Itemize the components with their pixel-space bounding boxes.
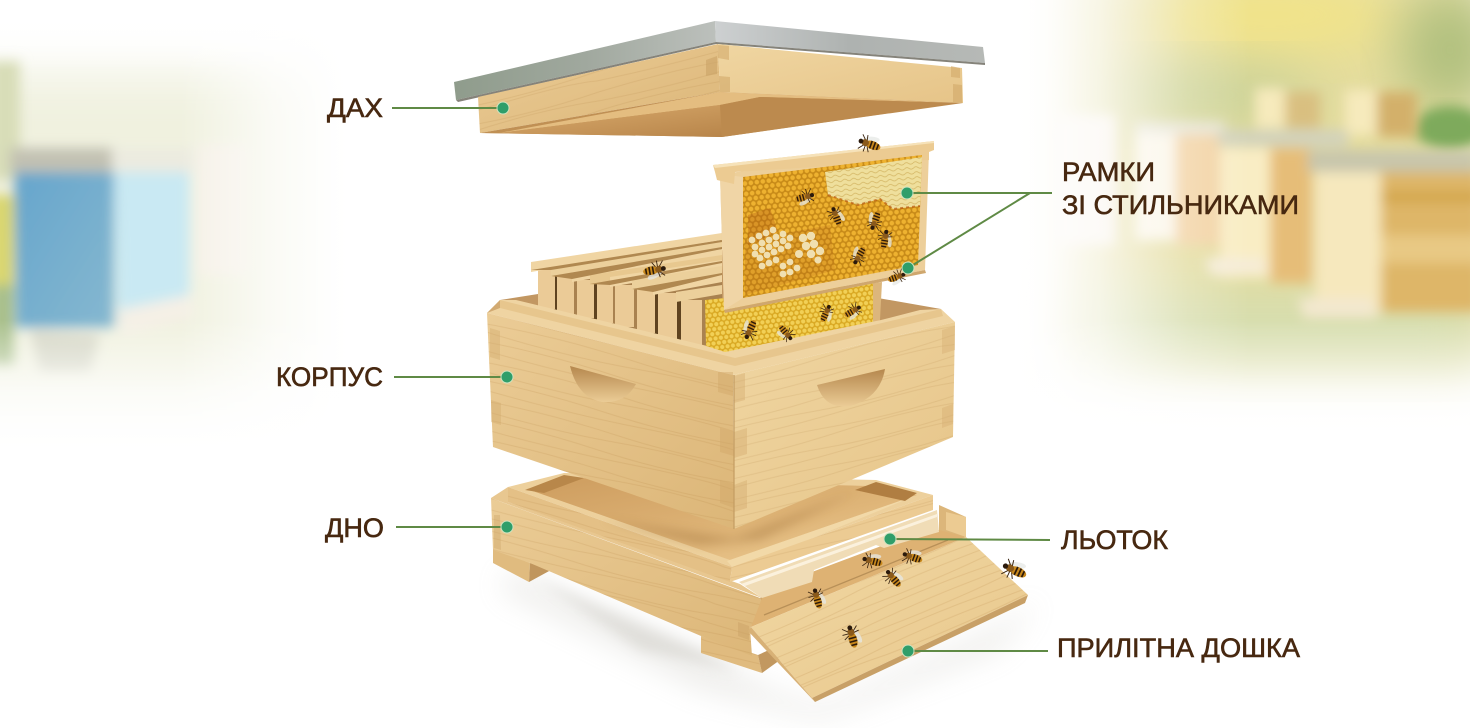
frame wood: [713, 141, 934, 313]
hive: body interior and comb frames: [500, 233, 941, 358]
label: корпус: КОРПУС: [276, 362, 383, 392]
hive: raised comb frame (рамка): [713, 141, 934, 313]
hive: bottom board (дно): [491, 473, 966, 673]
comb in lower frame: [705, 282, 882, 353]
callout: рамки зі стільниками: [901, 157, 1299, 274]
entrance floor: [751, 530, 966, 627]
left hand hold: [570, 366, 636, 402]
honeycomb: [743, 155, 922, 298]
callout: дно: [325, 513, 513, 543]
left foot: [493, 548, 551, 582]
body interior: [500, 250, 941, 358]
upper rim: [487, 300, 955, 375]
base side: [491, 487, 770, 656]
entrance slot bar: [739, 510, 939, 598]
entrance reducer post: [939, 505, 966, 537]
callout: дах: [327, 93, 509, 123]
hive: landing board (прилітна дошка): [748, 537, 1028, 702]
tray: [508, 473, 933, 582]
front foot: [701, 636, 780, 673]
ground shadows: [500, 570, 1040, 720]
hive: body (корпус): [487, 300, 955, 529]
label: дах: ДАХ: [327, 93, 383, 123]
right hand hold: [817, 369, 885, 407]
label: рамки зі стильниками: РАМКИ: [1062, 157, 1155, 187]
callout: прилітна дошка: [902, 633, 1300, 663]
label: прилітна дошка: ПРИЛІТНА ДОШКА: [1057, 633, 1300, 663]
left wall: [487, 313, 734, 529]
roof underside: [480, 92, 963, 137]
label: дно: ДНО: [325, 513, 384, 543]
background: left blue hive: [0, 60, 340, 420]
capped brood: [749, 227, 824, 277]
shadow of body on tray: [600, 490, 860, 545]
metal cover: [454, 21, 985, 102]
bees: [642, 131, 1031, 650]
label: рамки зі стильниками: ЗІ СТИЛЬНИКАМИ: [1062, 190, 1299, 220]
roof walls: [478, 44, 963, 133]
hive: roof (дах): [454, 21, 985, 137]
row of frames: [531, 233, 722, 345]
label: льоток: ЛЬОТОК: [1061, 525, 1168, 555]
right wall: [733, 322, 955, 529]
background: right hives: [1055, 0, 1470, 380]
callout: корпус: [276, 362, 513, 392]
callout: льоток: [884, 525, 1168, 555]
